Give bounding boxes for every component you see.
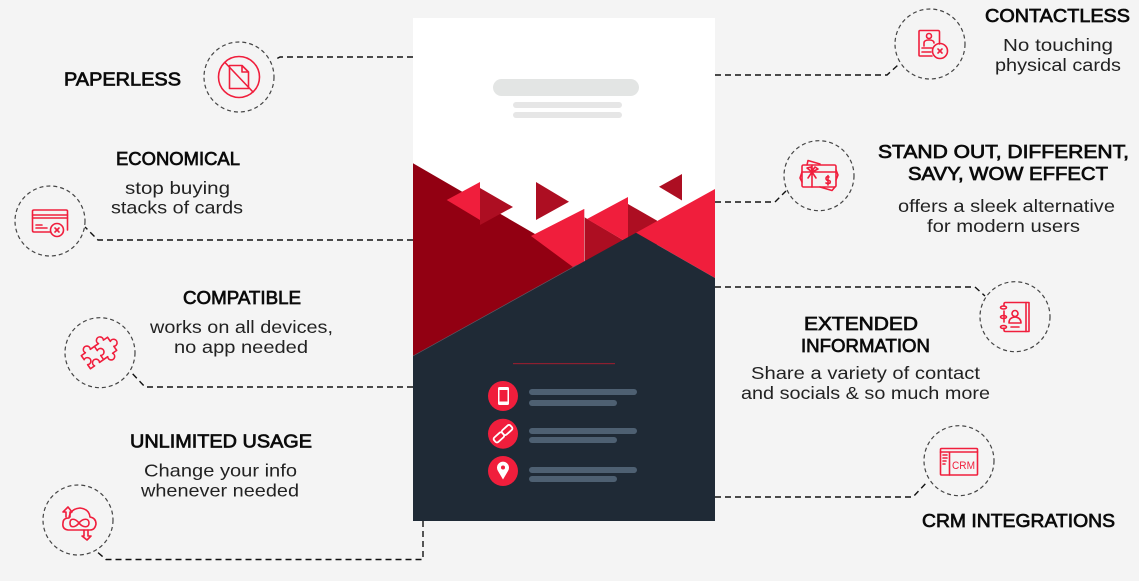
callout: crm integrations	[715, 426, 1115, 531]
callout: stand out: SAVY, WOW EFFECT	[908, 164, 1108, 184]
icon: address book	[1000, 302, 1029, 332]
icon: crm window: CRM	[952, 460, 975, 472]
callout: stand out: STAND OUT, DIFFERENT,	[878, 142, 1129, 162]
callout: paperless: PAPERLESS	[64, 70, 181, 90]
callout: contactless: physical cards	[995, 55, 1121, 75]
callout: unlimited usage	[43, 432, 423, 560]
large dark red triangle	[413, 163, 592, 356]
icon: card with cross	[32, 210, 68, 236]
placeholder name bar	[493, 79, 639, 96]
icon: puzzle pieces	[78, 330, 124, 373]
decorative triangles	[447, 174, 715, 278]
callout: contactless: CONTACTLESS	[985, 6, 1130, 26]
callout: unlimited usage: whenever needed	[140, 480, 299, 500]
panel: phone card mockup	[413, 18, 715, 521]
callout: contactless: No touching	[1003, 35, 1113, 55]
callout: extended information: EXTENDED	[804, 314, 918, 334]
callout: stand out	[715, 141, 1129, 236]
callout: extended information: and socials & so much more	[741, 383, 990, 403]
icon: no paper	[218, 56, 260, 98]
callout: stand out: offers a sleek alternative	[898, 196, 1115, 216]
placeholder subtitle bars	[513, 102, 622, 118]
callout: economical: stacks of cards	[111, 198, 243, 218]
contact row: location	[488, 456, 637, 486]
callout: crm integrations: CRM INTEGRATIONS	[922, 511, 1115, 531]
callout: extended information: INFORMATION	[801, 336, 930, 356]
callout: compatible	[65, 288, 413, 388]
red divider	[513, 363, 615, 364]
callout: paperless	[64, 42, 413, 112]
callout: contactless	[715, 6, 1130, 79]
callout: unlimited usage: Change your info	[144, 460, 297, 480]
icon: gift cards	[800, 160, 838, 190]
navy lower panel	[413, 233, 715, 521]
callout: compatible: works on all devices,	[149, 317, 333, 337]
callout: economical: ECONOMICAL	[116, 149, 240, 169]
callout: compatible: COMPATIBLE	[183, 288, 301, 308]
icon: id card with cross	[919, 30, 948, 58]
contact row: phone	[488, 381, 637, 411]
contact row: link	[488, 419, 637, 449]
callout: economical	[15, 149, 413, 256]
icon: crm window	[940, 448, 978, 475]
callout: extended information: Share a variety of contact	[751, 363, 980, 383]
callout: compatible: no app needed	[174, 337, 308, 357]
callout: economical: stop buying	[125, 178, 230, 198]
callout: extended information	[715, 282, 1050, 403]
callout: stand out: for modern users	[927, 216, 1080, 236]
callout: unlimited usage: UNLIMITED USAGE	[130, 432, 312, 452]
icon: cloud infinity with arrows	[63, 507, 96, 540]
